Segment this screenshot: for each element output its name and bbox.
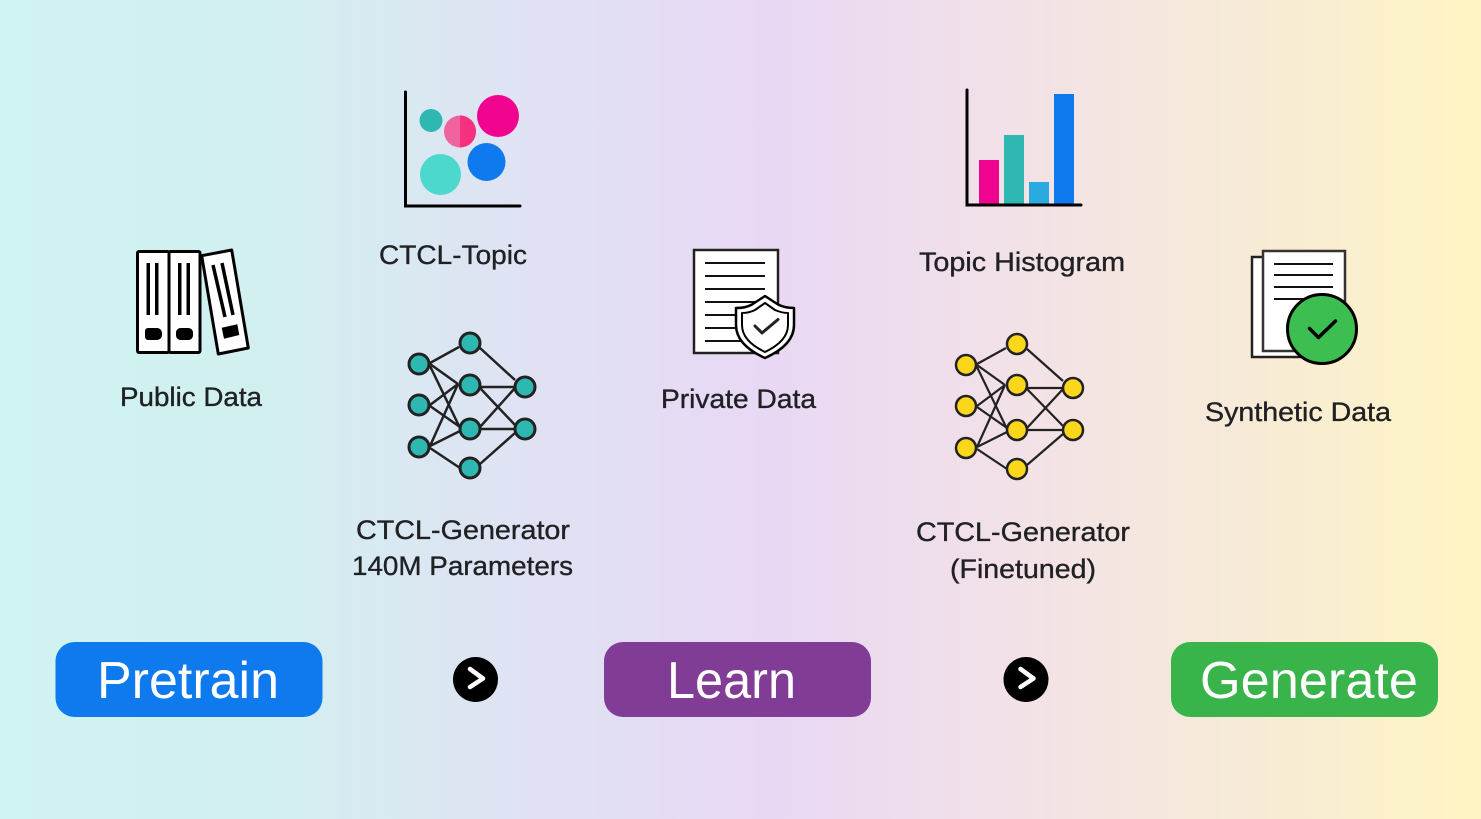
button: Generate — [1171, 642, 1438, 717]
label: CTCL-Generator (Finetuned) — [916, 517, 1130, 584]
button: Pretrain — [56, 642, 322, 717]
label: Private Data: Private Data — [661, 384, 817, 414]
label: CTCL-Generator (Finetuned): (Finetuned) — [950, 554, 1096, 584]
button: Learn — [604, 642, 871, 717]
icon: yellow neural network — [956, 334, 1083, 479]
label: Public Data: Public Data — [120, 382, 263, 412]
label: CTCL-Topic: CTCL-Topic — [379, 240, 527, 270]
arrow: Learn to Generate — [1004, 657, 1048, 702]
label: Synthetic Data: Synthetic Data — [1205, 397, 1392, 427]
label: CTCL-Generator 140M Parameters: CTCL-Generator — [356, 515, 570, 545]
icon: public data binders — [138, 250, 248, 354]
icon: bubble chart — [406, 92, 520, 206]
button: Generate: Generate — [1200, 652, 1418, 710]
label: CTCL-Generator 140M Parameters: 140M Parameters — [352, 551, 573, 581]
icon: private data document with shield — [694, 250, 794, 358]
arrow: Pretrain to Learn — [453, 657, 498, 702]
button: Learn: Learn — [667, 652, 796, 710]
icon: teal neural network — [409, 333, 535, 478]
label: CTCL-Generator (Finetuned): CTCL-Generator — [916, 517, 1130, 547]
button: Pretrain: Pretrain — [97, 652, 279, 710]
label: CTCL-Generator 140M Parameters — [352, 515, 573, 581]
label: Topic Histogram: Topic Histogram — [919, 247, 1125, 277]
icon: bar chart histogram — [967, 90, 1081, 205]
icon: synthetic data documents with check — [1252, 251, 1356, 364]
